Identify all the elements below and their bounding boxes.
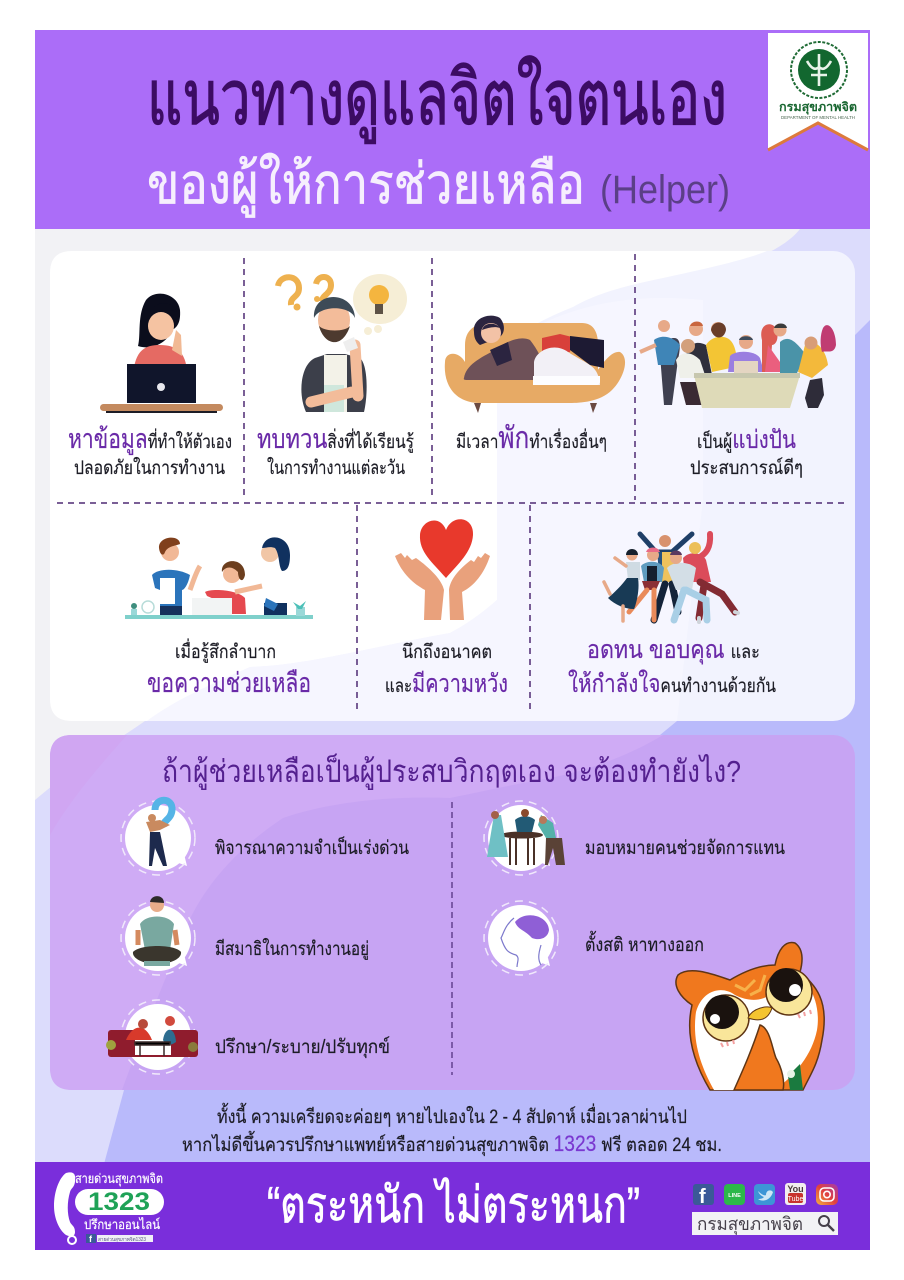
tip 5: ask for help — [125, 537, 313, 698]
tip 2 text — [257, 424, 414, 479]
hotline badge: f — [89, 1234, 93, 1244]
tip 3 text: มีเวลาพักทำเรื่องอื่นๆ — [456, 422, 607, 455]
tip 4: share experience — [640, 320, 836, 479]
tip 6: future and hope — [385, 519, 508, 698]
tip 7: patience, thanks, encouragement — [568, 534, 776, 698]
icon: head with brain — [484, 901, 558, 975]
tip 4 text: เป็นผู้แบ่งปัน — [697, 426, 796, 454]
tip 1: search information — [68, 294, 232, 479]
tip 1 text — [68, 424, 232, 479]
footer band — [35, 1162, 870, 1250]
social icons: LINE — [728, 1193, 741, 1199]
tip 5 text: ขอความช่วยเหลือ — [147, 668, 311, 698]
header banner — [35, 30, 870, 229]
social icons: Tube — [788, 1196, 803, 1203]
tip 4 text — [690, 426, 803, 479]
icon: friends on sofas — [106, 1000, 198, 1074]
item text: ตั้งสติ หาทางออก — [585, 931, 704, 956]
icon: meditating man — [121, 896, 195, 975]
item: mindfulness at work — [121, 896, 369, 975]
page background — [35, 229, 870, 1164]
tip 1 text: หาข้อมูลที่ทำให้ตัวเอง — [68, 424, 232, 455]
social icons — [693, 1183, 838, 1208]
hotline badge: ปรึกษาออนไลน์ — [84, 1217, 160, 1232]
closing note — [182, 1103, 722, 1157]
hotline badge: สายด่วนสุขภาพจิต1323 — [98, 1236, 146, 1243]
icon: people around table — [484, 801, 565, 875]
icon: thinking man — [278, 274, 407, 412]
hotline badge: สายด่วนสุขภาพจิต — [75, 1171, 163, 1187]
item: delegate — [484, 801, 785, 875]
search box — [692, 1212, 838, 1235]
item: consider urgency — [121, 800, 409, 875]
icon: team around table — [640, 320, 836, 408]
logo: Department of Mental Health — [768, 33, 868, 150]
tip 6 text — [385, 642, 508, 698]
tip 5 text: เมื่อรู้สึกลำบาก — [175, 638, 276, 663]
tip 7 text: ให้กำลังใจคนทำงานด้วยกัน — [568, 669, 776, 698]
panel: self-care tips — [50, 251, 855, 721]
logo: Department of Mental Health: กรมสุขภาพจิต — [779, 100, 857, 115]
subtitle: Helper: (Helper) — [600, 168, 730, 212]
subtitle: ของผู้ให้การช่วยเหลือ — [147, 152, 585, 218]
tip 7 text: อดทน ขอบคุณ และ — [587, 636, 760, 665]
panel heading: ถ้าผู้ช่วยเหลือเป็นผู้ประสบวิกฤตเอง จะต้องทำยังไง? — [162, 753, 741, 790]
icon: man with question mark — [121, 800, 195, 875]
tip 2: review lessons — [257, 274, 414, 479]
tip 3: take a rest — [445, 316, 625, 455]
tip 6 text: และมีความหวัง — [385, 670, 508, 698]
tip 2 text: ทบทวนสิ่งที่ได้เรียนรู้ — [257, 424, 414, 454]
tip 6 text: นึกถึงอนาคต — [402, 642, 492, 663]
search box: กรมสุขภาพจิต — [697, 1214, 803, 1235]
closing note: ทั้งนี้ ความเครียดจะค่อยๆ หายไปเองใน 2 - 4 สัปดาห์ เมื่อเวลาผ่านไป — [217, 1103, 687, 1128]
item: consult and vent — [106, 1000, 390, 1074]
slogan: “ตระหนัก ไม่ตระหนก” — [267, 1177, 640, 1233]
tip 5 text — [147, 638, 311, 698]
hotline badge — [54, 1171, 164, 1244]
social icons: f — [699, 1186, 706, 1208]
item text: มีสมาธิในการทำงานอยู่ — [215, 938, 369, 960]
icon: family at table — [125, 537, 313, 619]
closing note: หากไม่ดีขึ้นควรปรึกษาแพทย์หรือสายด่วนสุขภาพจิต 1323 ฟรี ตลอด 24 ชม. — [182, 1131, 722, 1157]
item text: มอบหมายคนช่วยจัดการแทน — [585, 838, 785, 859]
tip 1 text: ปลอดภัยในการทำงาน — [74, 457, 225, 479]
panel: if the helper is also a victim — [50, 735, 855, 1090]
tip 4 text: ประสบการณ์ดีๆ — [690, 457, 803, 479]
icon: cheering group — [604, 534, 738, 622]
owl mascot — [676, 942, 824, 1090]
item text: พิจารณาความจำเป็นเร่งด่วน — [215, 835, 409, 859]
logo: Department of Mental Health: DEPARTMENT OF MENTAL HEALTH — [781, 115, 855, 120]
tip 7 text — [568, 636, 776, 698]
social icons: You — [787, 1184, 804, 1194]
hotline badge: 1323 — [88, 1188, 150, 1216]
item text: ปรึกษา/ระบาย/ปรับทุกข์ — [215, 1036, 390, 1059]
icon: woman resting on sofa — [445, 316, 625, 413]
tip 2 text: ในการทำงานแต่ละวัน — [267, 457, 405, 479]
icon: woman with laptop — [100, 294, 223, 413]
icon: heart in hands — [395, 519, 490, 620]
item: be mindful, find a way out — [484, 901, 704, 975]
